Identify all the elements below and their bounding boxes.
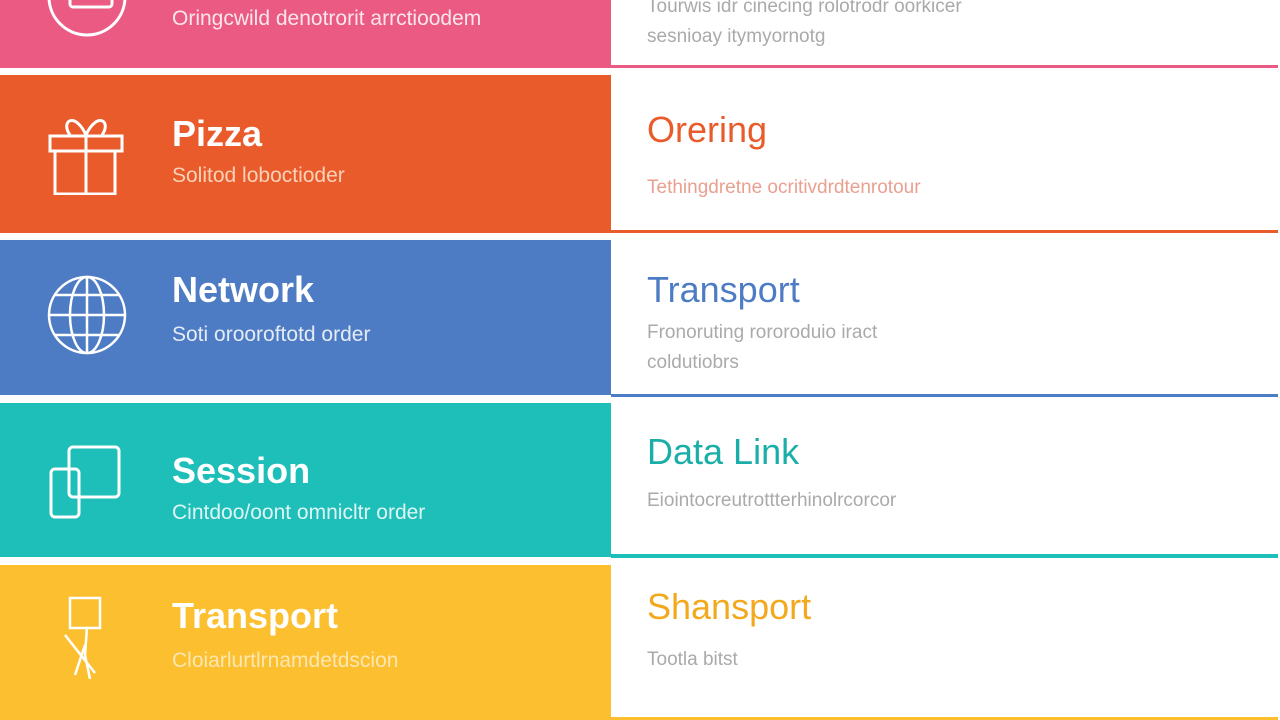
right title: Orering	[647, 109, 767, 150]
text: right desc: sesnioay itymyornotg	[647, 26, 825, 47]
row 4: teal	[0, 403, 1278, 558]
panel: yellow left	[0, 565, 611, 720]
panel: orange left	[0, 75, 611, 233]
panel: blue left	[0, 240, 611, 395]
title: Transport	[172, 595, 338, 636]
icon: gift	[48, 119, 124, 195]
yellow line	[611, 717, 1278, 720]
right title: Transport	[647, 269, 800, 310]
right desc: Tootla bitst	[647, 649, 738, 670]
title: Network	[172, 269, 314, 310]
row 3: blue	[0, 240, 1278, 397]
icon: globe	[48, 276, 126, 354]
right desc: Eiointocreutrottterhinolrcorcor	[647, 490, 896, 511]
right desc	[647, 322, 878, 373]
teal line	[611, 554, 1278, 558]
icon: cards	[50, 446, 120, 518]
right desc: Tethingdretne ocritivdrdtenrotour	[647, 177, 921, 198]
title: Session	[172, 450, 310, 491]
icon: figure	[64, 596, 102, 679]
orange line	[611, 230, 1278, 233]
blue line	[611, 394, 1278, 397]
row 1: pink	[0, 0, 1278, 68]
subtitle: Solitod loboctioder	[172, 164, 345, 187]
pink line	[611, 65, 1278, 68]
panel: pink left	[0, 0, 611, 68]
subtitle: Oringcwild denotrorit arrctioodem	[172, 7, 481, 30]
title: Pizza	[172, 113, 262, 154]
subtitle: Cloiarlurtlrnamdetdscion	[172, 649, 398, 672]
right desc: coldutiobrs	[647, 352, 739, 373]
subtitle: Soti orooroftotd order	[172, 323, 370, 346]
subtitle: Cintdoo/oont omnicltr order	[172, 501, 425, 524]
row 2: orange	[0, 75, 1278, 233]
panel: teal left	[0, 403, 611, 557]
icon: chat bubble	[48, 0, 126, 36]
right title: Shansport	[647, 586, 811, 627]
right title: Data Link	[647, 431, 799, 472]
right desc: Fronoruting rororoduio iract	[647, 322, 877, 343]
text: right desc	[647, 0, 962, 47]
row 5: yellow	[0, 565, 1278, 720]
